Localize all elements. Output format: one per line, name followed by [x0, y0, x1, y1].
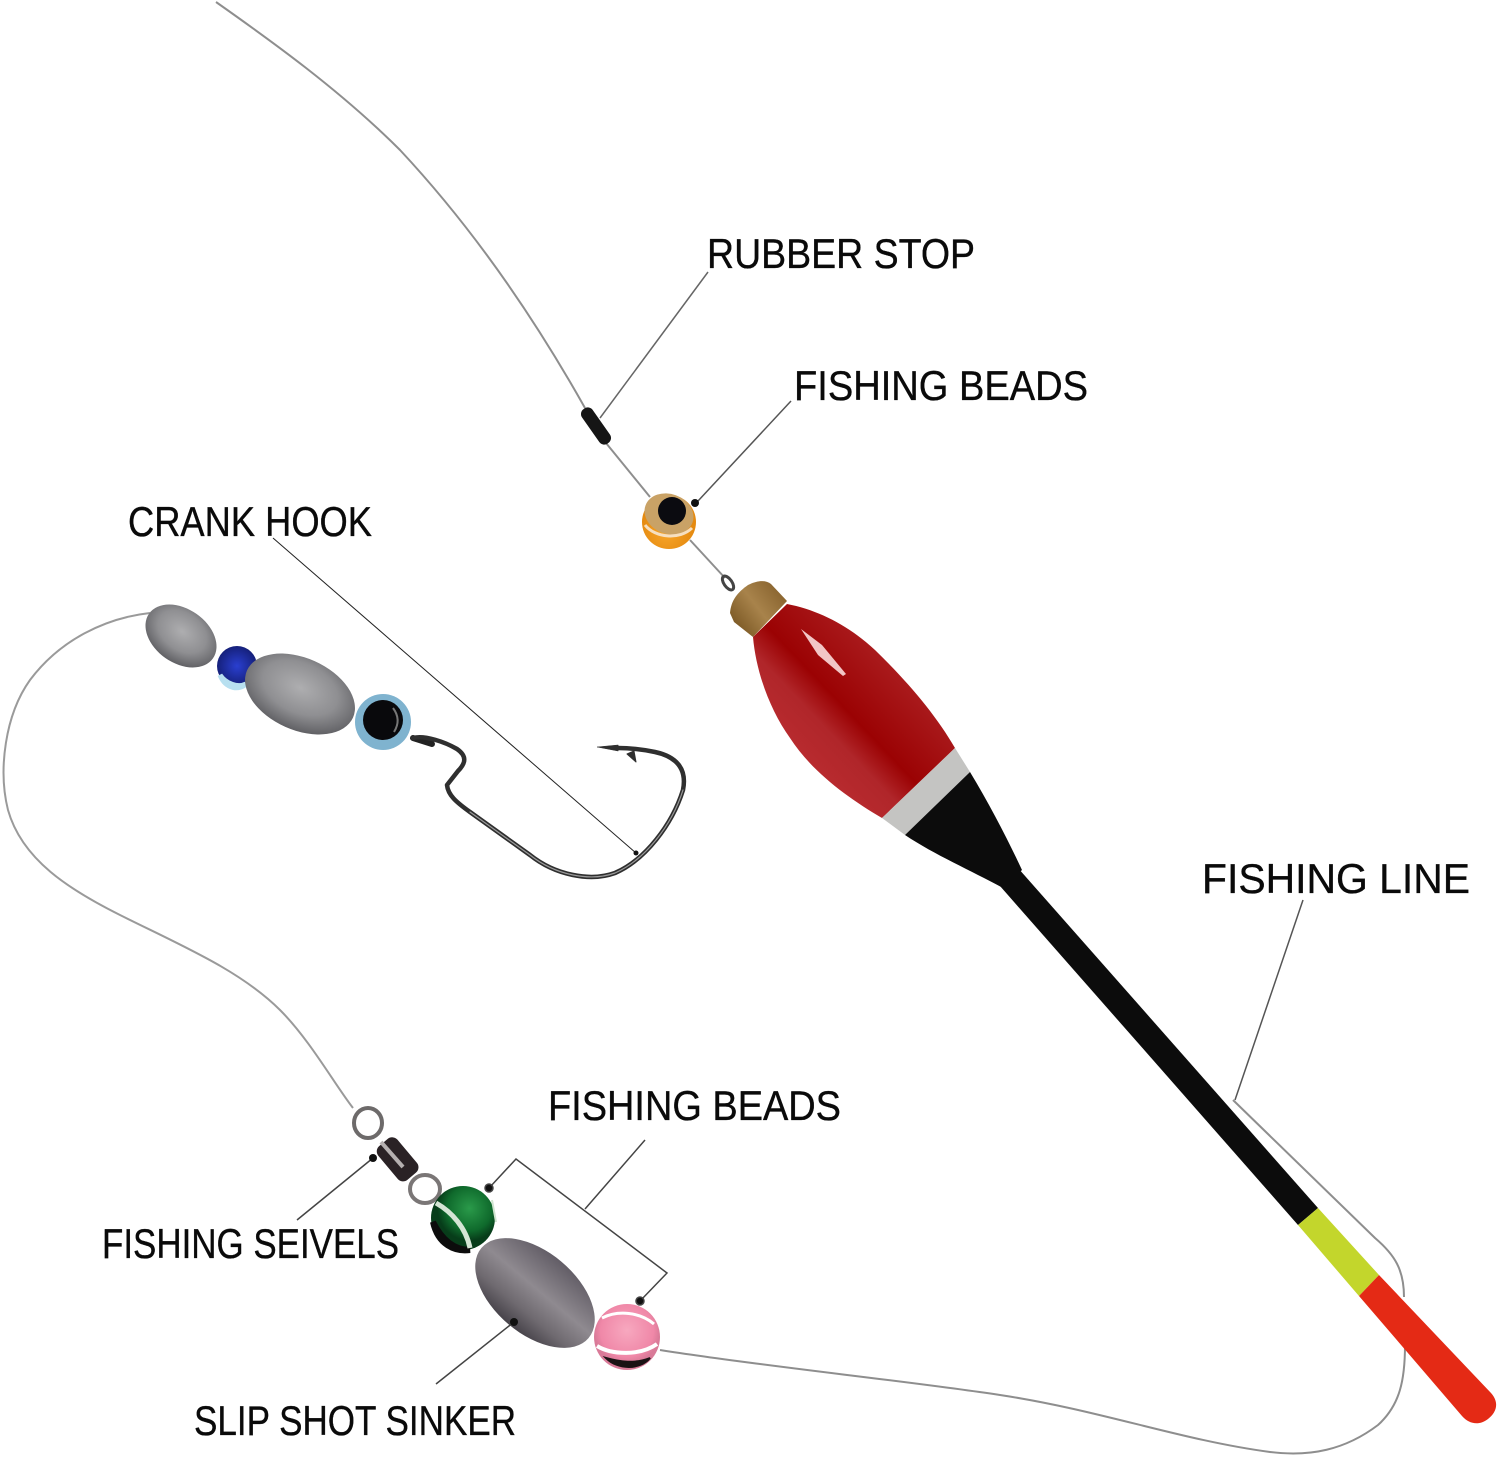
leader: slip shot sinker — [436, 1318, 518, 1384]
float highlight — [801, 629, 846, 676]
float white band — [882, 748, 970, 835]
fishing line: bottom section around float tip — [660, 1100, 1405, 1454]
leader: fishing swivels — [297, 1154, 377, 1220]
float brass cap — [730, 581, 787, 637]
orange fishing bead — [639, 487, 699, 549]
label: fishing seivels: FISHING SEIVELS — [102, 1220, 399, 1267]
crank hook assembly — [134, 592, 684, 877]
hook — [413, 737, 684, 877]
black eye bead — [355, 694, 411, 750]
label: crank hook: CRANK HOOK — [128, 498, 372, 545]
swivel — [354, 1108, 440, 1203]
float black stem — [1000, 868, 1318, 1225]
fishing line: long loop to swivel — [4, 613, 353, 1108]
label: fishing beads upper: FISHING BEADS — [794, 362, 1088, 409]
small sinker — [134, 592, 228, 680]
blue bead — [217, 646, 257, 688]
label: slip shot sinker: SLIP SHOT SINKER — [194, 1397, 516, 1444]
float — [720, 574, 1496, 1423]
label: fishing line: FISHING LINE — [1202, 855, 1470, 902]
fishing line: top section — [216, 2, 725, 578]
label: rubber stop: RUBBER STOP — [707, 230, 975, 277]
rubber stop — [579, 405, 613, 447]
float yellow band — [1298, 1208, 1379, 1296]
green fishing bead — [431, 1186, 496, 1250]
float black cone — [905, 772, 1022, 888]
leader: fishing line — [1235, 900, 1303, 1100]
lower sinker — [455, 1217, 615, 1369]
float eyelet — [720, 574, 736, 592]
float red tip — [1359, 1275, 1496, 1423]
leader: lower fishing beads bracket — [485, 1140, 667, 1305]
float red body — [753, 604, 955, 818]
label: fishing beads lower: FISHING BEADS — [548, 1082, 841, 1129]
pink fishing bead — [594, 1304, 660, 1370]
leader: crank hook — [273, 538, 638, 856]
leader: upper fishing beads — [691, 401, 791, 507]
leader: rubber stop — [600, 272, 708, 418]
large sinker — [232, 638, 368, 750]
